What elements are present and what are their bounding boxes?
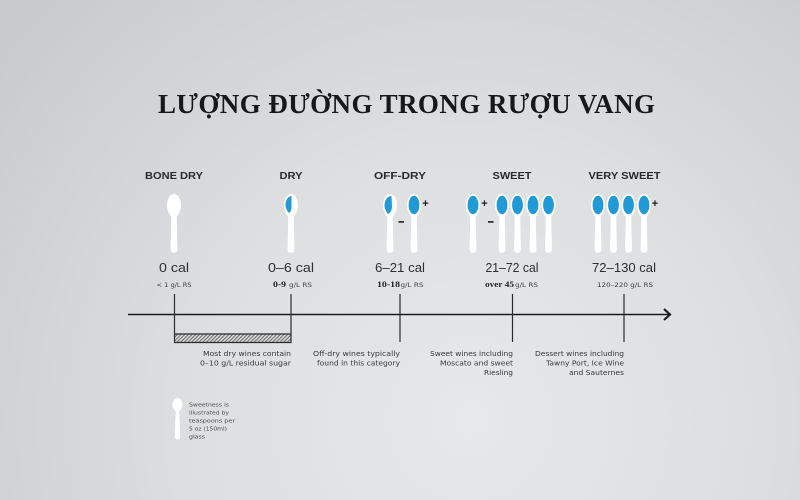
icon: half-filled spoon — [383, 194, 397, 253]
column: off-dry — [374, 170, 429, 289]
icon: four full spoons — [591, 194, 651, 253]
calories: sweet: 21–72 cal — [486, 261, 538, 275]
plus sign: + — [652, 198, 658, 210]
column: sweet — [466, 170, 556, 289]
residual sugar: sweet: g/L RS — [515, 282, 538, 289]
icon: half-filled spoon — [284, 194, 298, 253]
residual sugar: sweet — [485, 280, 538, 289]
column: very sweet — [588, 170, 661, 289]
calories: off-dry: 6–21 cal — [375, 261, 425, 275]
heading: dry: DRY — [280, 170, 302, 182]
column: dry — [268, 170, 314, 289]
sweet tick — [512, 294, 514, 342]
note: sweet wines: Moscato and sweet — [440, 360, 513, 368]
residual sugar: bone dry: < 1 g/L RS — [156, 282, 192, 289]
minus sign — [488, 221, 494, 223]
icon: five full spoons — [466, 194, 556, 253]
residual sugar: off-dry: 10-18 — [377, 280, 400, 289]
residual sugar: dry: g/L RS — [289, 282, 312, 289]
plus sign: + — [422, 198, 429, 210]
legend text — [189, 402, 236, 440]
note: sweet wines: Sweet wines including — [430, 350, 513, 358]
note: sweet wines — [430, 350, 513, 377]
residual sugar: very sweet: 120–220 g/L RS — [597, 282, 653, 289]
dry range bracket with hatched bar — [174, 294, 291, 342]
plus sign: + — [481, 198, 488, 210]
note: sweet wines: Riesling — [484, 369, 513, 377]
note: dessert wines: Tawny Port, Ice Wine — [545, 360, 624, 368]
very sweet tick — [623, 294, 625, 342]
icon: full spoon — [407, 194, 421, 253]
icon: empty spoon — [167, 194, 181, 253]
note: dessert wines — [535, 350, 624, 377]
calories: very sweet: 72–130 cal — [592, 261, 656, 275]
note: off-dry wines: Off-dry wines typically — [313, 350, 400, 358]
note: off-dry wines: found in this category — [317, 360, 400, 368]
calories: bone dry: 0 cal — [159, 261, 189, 275]
heading: off-dry: OFF-DRY — [374, 170, 426, 182]
heading: very sweet: VERY SWEET — [588, 170, 661, 182]
note: dry wines — [200, 350, 291, 368]
legend text: teaspoons per — [189, 418, 236, 424]
legend text: illustrated by — [189, 410, 230, 416]
note: dry wines: 0–10 g/L residual sugar — [200, 360, 291, 368]
legend text: 5 oz (150ml) — [189, 426, 227, 432]
legend text: Sweetness is — [189, 402, 229, 408]
note: dessert wines: and Sauternes — [569, 369, 624, 377]
heading: sweet: SWEET — [492, 170, 532, 182]
residual sugar: dry — [273, 280, 312, 289]
residual sugar: sweet: over 45 — [485, 280, 514, 289]
residual sugar: off-dry — [377, 280, 424, 289]
legend: spoon explanation — [172, 398, 236, 440]
off-dry tick — [399, 294, 401, 342]
residual sugar: off-dry: g/L RS — [400, 282, 424, 289]
heading: bone dry: BONE DRY — [145, 170, 203, 182]
timeline axis with arrow — [128, 309, 670, 320]
note: off-dry wines — [313, 350, 400, 368]
icon: legend spoon — [172, 398, 182, 440]
column: bone dry — [145, 170, 203, 289]
residual sugar: dry: 0-9 — [273, 280, 286, 289]
note: dessert wines: Dessert wines including — [535, 350, 624, 358]
minus sign — [398, 221, 404, 223]
calories: dry: 0–6 cal — [268, 261, 314, 275]
title: LƯỢNG ĐƯỜNG TRONG RƯỢU VANG — [158, 89, 655, 119]
note: dry wines: Most dry wines contain — [203, 350, 291, 358]
legend text: glass — [189, 434, 205, 440]
